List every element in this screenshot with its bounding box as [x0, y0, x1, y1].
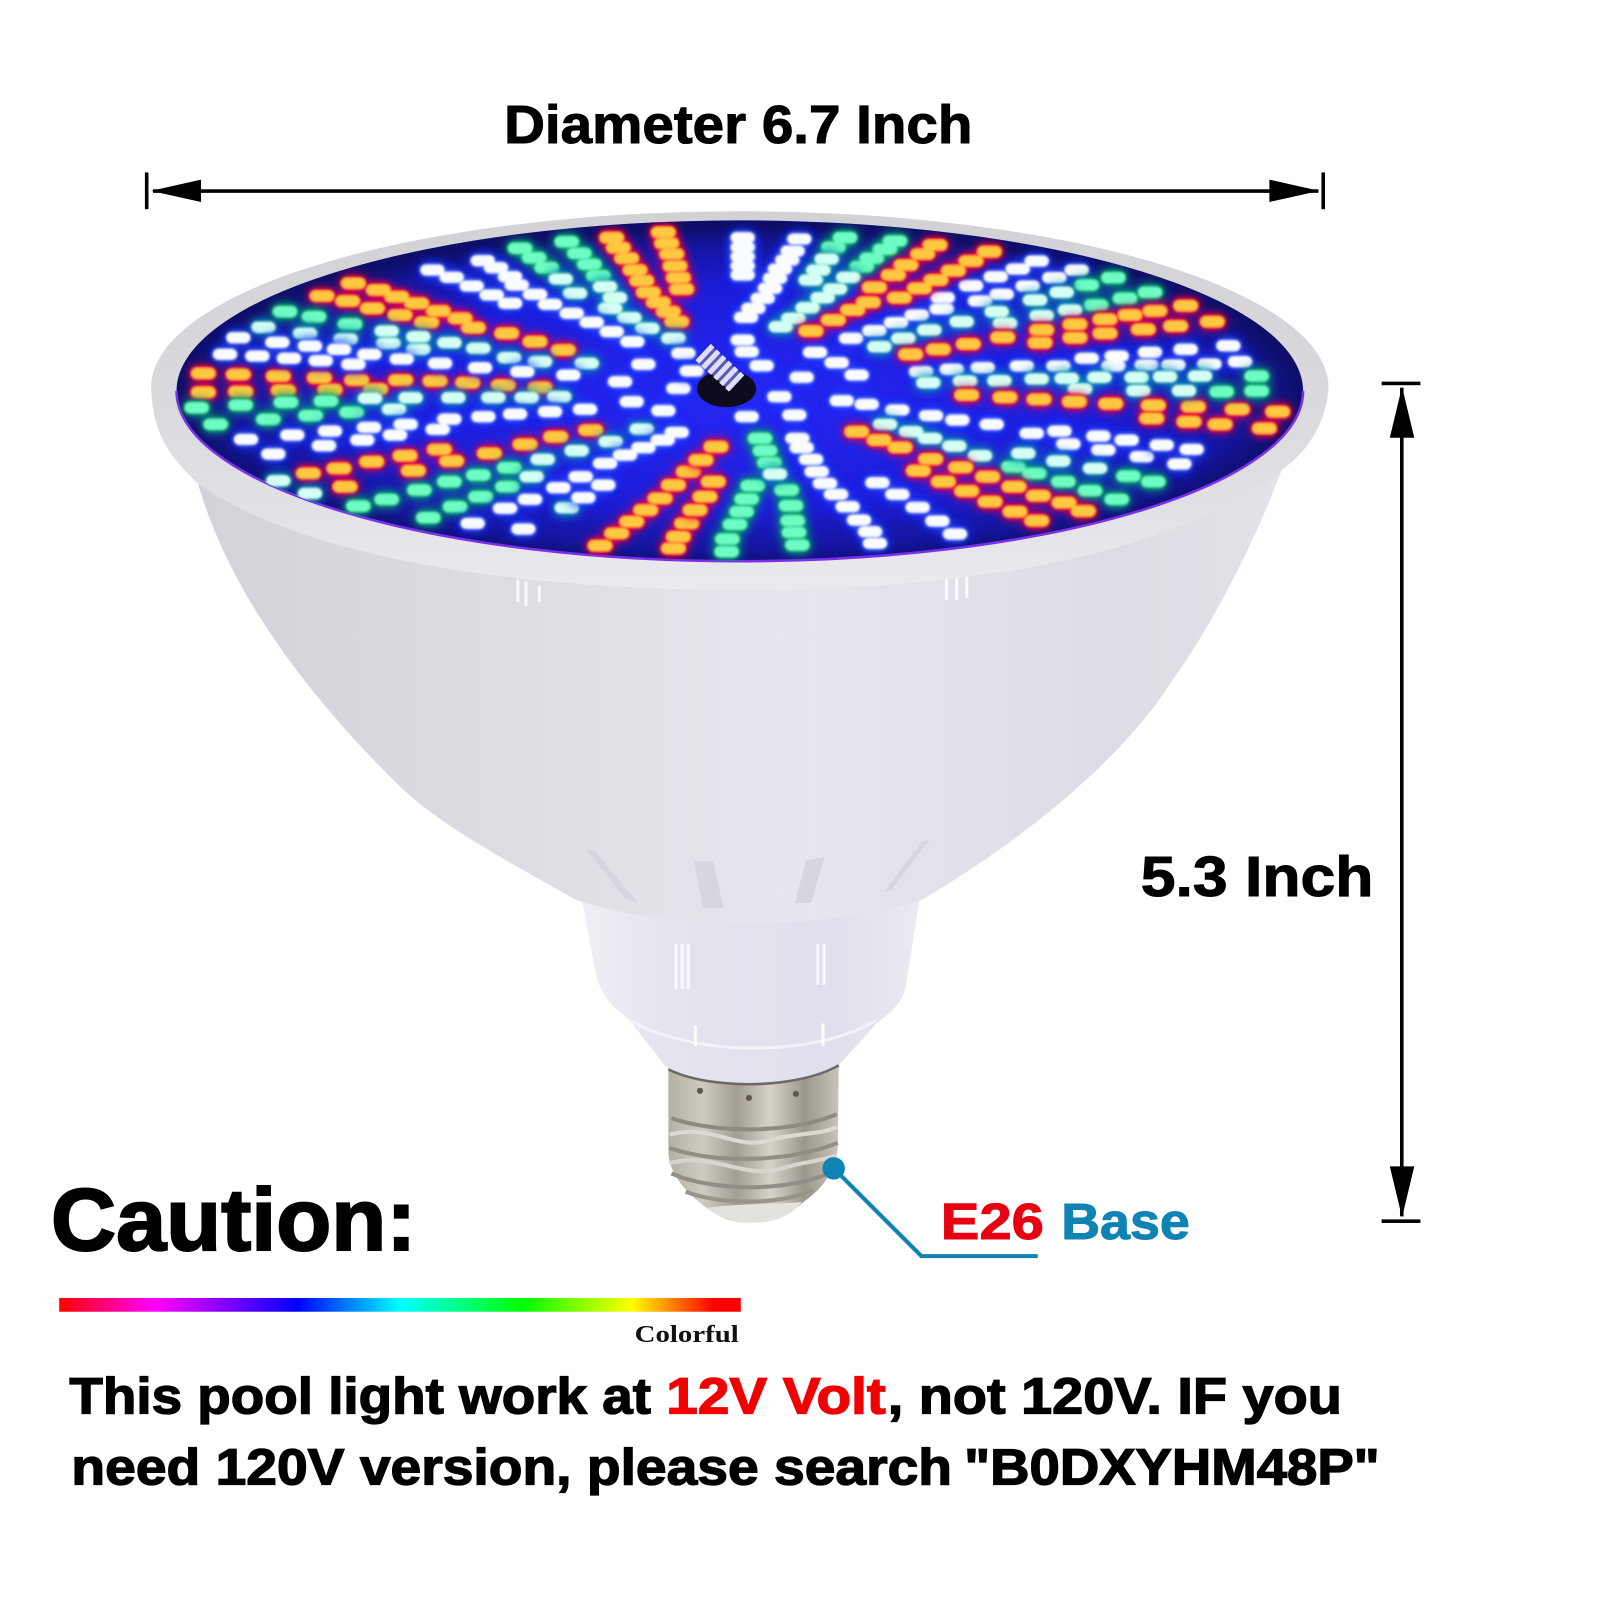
base holes: [697, 1088, 799, 1101]
far right LEDs: [1155, 306, 1284, 464]
caution text: , not 120V. IF you: [888, 1367, 1342, 1424]
base rim line: [668, 1065, 839, 1084]
LED disk: [177, 220, 1303, 561]
red right: [1169, 306, 1284, 428]
white right: [1155, 346, 1247, 464]
red left: [197, 232, 695, 548]
LED array: [190, 232, 1284, 552]
cyan left: [257, 279, 680, 508]
infographic: [54, 104, 1420, 1496]
arrow: diameter dimension: [145, 172, 1325, 209]
caution text: "B0DXYHM48P": [964, 1439, 1380, 1496]
rainbow bar: [59, 1298, 741, 1312]
green left: [190, 242, 605, 518]
rim: [151, 211, 1329, 590]
cooling ribs: [587, 840, 930, 908]
left LEDs: [190, 232, 695, 548]
center hole: [697, 370, 756, 407]
caution text: [69, 1367, 1380, 1496]
neck band line: [631, 1020, 876, 1048]
label: colorful: Colorful: [635, 1321, 739, 1348]
glossy highlights: [516, 571, 968, 1046]
power cord spring: [703, 352, 737, 384]
caution text: 12V Volt: [666, 1367, 886, 1424]
cyan right: [1158, 376, 1207, 391]
disk purple edge: [177, 391, 1303, 561]
label: E26 Base: [941, 1193, 1190, 1250]
red center: [688, 245, 1162, 521]
caution text: need 120V version, please search: [71, 1439, 952, 1496]
cyan center: [768, 259, 1145, 474]
bulb neck: [580, 888, 921, 1084]
title: diameter: Diameter 6.7 Inch: [504, 95, 972, 155]
label: E26 Base: E26: [941, 1193, 1044, 1250]
green center: [720, 238, 1160, 552]
center and right LEDs: [685, 238, 1162, 552]
white left: [218, 261, 690, 529]
white center: [685, 238, 1157, 543]
caution text: This pool light work at: [69, 1367, 651, 1424]
green right: [1215, 376, 1263, 392]
heading: caution: Caution:: [51, 1171, 416, 1269]
product: pool light bulb: [151, 211, 1329, 1223]
screw thread: [669, 1114, 838, 1202]
arrow: height dimension: [1382, 382, 1420, 1223]
metal screw base: [668, 1065, 839, 1223]
label: E26 Base: Base: [1061, 1193, 1190, 1250]
bulb reflector body: [197, 464, 1284, 923]
callout: E26 base leader: [822, 1157, 1038, 1256]
base tip: [706, 1202, 802, 1223]
label: height: 5.3 Inch: [1141, 845, 1373, 908]
